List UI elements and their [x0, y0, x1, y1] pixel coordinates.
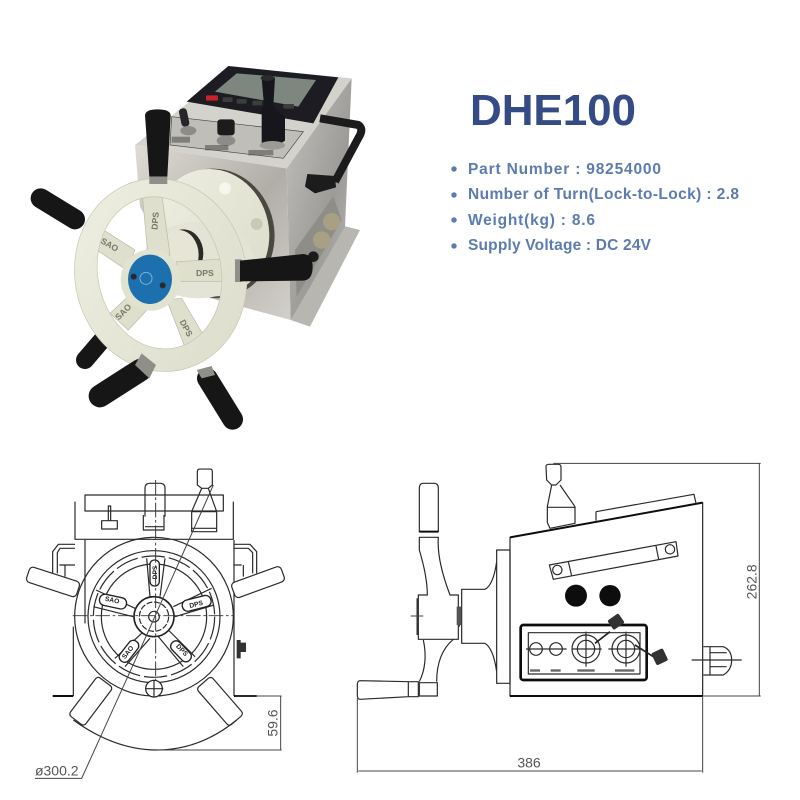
toggle switch: [178, 108, 196, 135]
spokes: SAO: [104, 596, 120, 606]
steel housing: [135, 67, 352, 320]
centre lines: [73, 480, 234, 697]
wheel housing: [142, 157, 287, 309]
wheel hub: [121, 249, 181, 311]
display side: [596, 494, 696, 521]
sweep arc: [73, 720, 237, 750]
spoke lettering: [99, 211, 214, 339]
top handle: [145, 109, 171, 184]
spokes: DPS: [152, 565, 159, 579]
product photo: DHE100 helm unit: [41, 66, 361, 419]
wheel rim: [57, 162, 265, 388]
dimension 386: [357, 696, 703, 773]
dimension 59.6: [157, 696, 282, 750]
shaft housing: [459, 550, 510, 683]
right handle: [235, 254, 313, 282]
centre handle: [143, 483, 165, 530]
spoke lettering: SAO: [99, 236, 120, 254]
spoke lettering: DPS: [149, 211, 161, 230]
dimension 262.8: [553, 463, 761, 696]
side handwheel: [357, 483, 461, 699]
spec: number of turns: Number of Turn(Lock-to-Lock) : 2.8: [468, 186, 739, 203]
hub: [134, 597, 174, 637]
strap handles: [53, 544, 257, 577]
lower lug: [145, 680, 163, 697]
spoke lettering: DPS: [178, 318, 195, 339]
side handles: [25, 566, 285, 727]
spokes: [93, 558, 214, 667]
display unit: [187, 66, 338, 123]
joystick: [546, 464, 575, 528]
blue hub badge: [128, 255, 172, 304]
cable gland: [692, 647, 742, 675]
spec: supply voltage: Supply Voltage : DC 24V: [468, 237, 652, 254]
panel labels: [172, 137, 273, 155]
connector panel: [521, 613, 668, 680]
strap handle: [549, 542, 678, 579]
carry handle: [305, 118, 361, 193]
spokes: DPS: [189, 600, 204, 610]
dimension 386: 386: [517, 754, 541, 770]
dimension 262.8: 262.8: [744, 564, 760, 599]
selector knob: [217, 119, 235, 146]
side view technical drawing: [357, 463, 761, 773]
side connector: [237, 640, 246, 658]
leader and diameter label: [35, 485, 213, 779]
leader and diameter label: ø300.2: [35, 763, 79, 779]
toggle: [102, 506, 117, 529]
dimension 59.6: 59.6: [265, 709, 281, 737]
title: DHE100: [470, 86, 636, 135]
wheel spokes: [92, 193, 237, 352]
spec: part number: Part Number : 98254000: [468, 161, 661, 178]
connector panel: [295, 197, 342, 297]
left handle: [41, 198, 75, 219]
lower right handle: [197, 366, 233, 419]
back handle: [85, 339, 103, 360]
enclosure: [510, 503, 703, 696]
front view technical drawing: [25, 469, 285, 779]
lower left handle: [100, 353, 156, 396]
spokes: DPS: [174, 643, 189, 658]
spokes: SAO: [121, 645, 135, 661]
base flange: [291, 225, 360, 327]
spec: weight: Weight(kg) : 8.6: [468, 212, 595, 229]
handwheel: [75, 537, 233, 696]
spoke lettering: SAO: [113, 302, 134, 322]
round plugs: [565, 585, 621, 607]
spoke lettering: DPS: [196, 268, 214, 278]
specification list: [451, 161, 739, 254]
joystick: [192, 469, 217, 532]
cabinet outline: [53, 495, 257, 696]
joystick: [260, 75, 285, 150]
